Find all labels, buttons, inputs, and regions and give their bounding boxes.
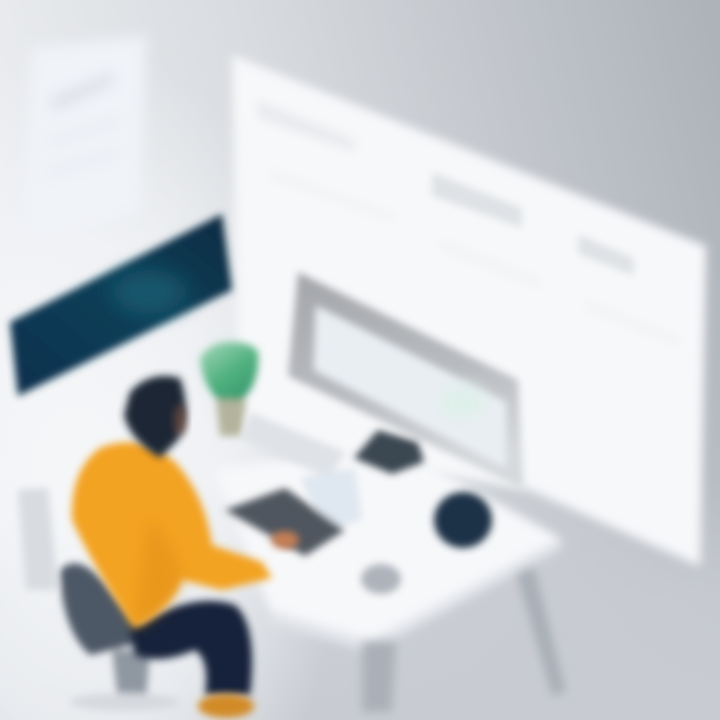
column heading 2 [432,172,522,228]
monitor stand [354,430,424,474]
keyboard and papers [225,412,362,556]
desk leg front [362,640,396,712]
column heading 1 [258,100,355,152]
face [173,404,187,436]
legs [130,601,252,695]
plant [200,342,258,436]
panel: faint paper top left [24,36,146,242]
torso [72,442,272,628]
panel: large white three-column sheet [232,55,706,566]
monitor [288,272,524,490]
round dark object on desk [434,492,492,548]
line block 2 [440,240,540,288]
chair [18,488,180,711]
shoe [198,694,254,718]
line block 3 [585,300,680,346]
shirt shadow [134,520,182,628]
person [72,376,299,718]
mouse [361,564,401,594]
head [124,376,186,458]
desk leg right [516,566,566,696]
dark screen panel [10,214,232,396]
column heading 3 [578,234,634,276]
desk [215,445,566,712]
line block 1 [270,170,395,222]
hand [271,531,299,549]
